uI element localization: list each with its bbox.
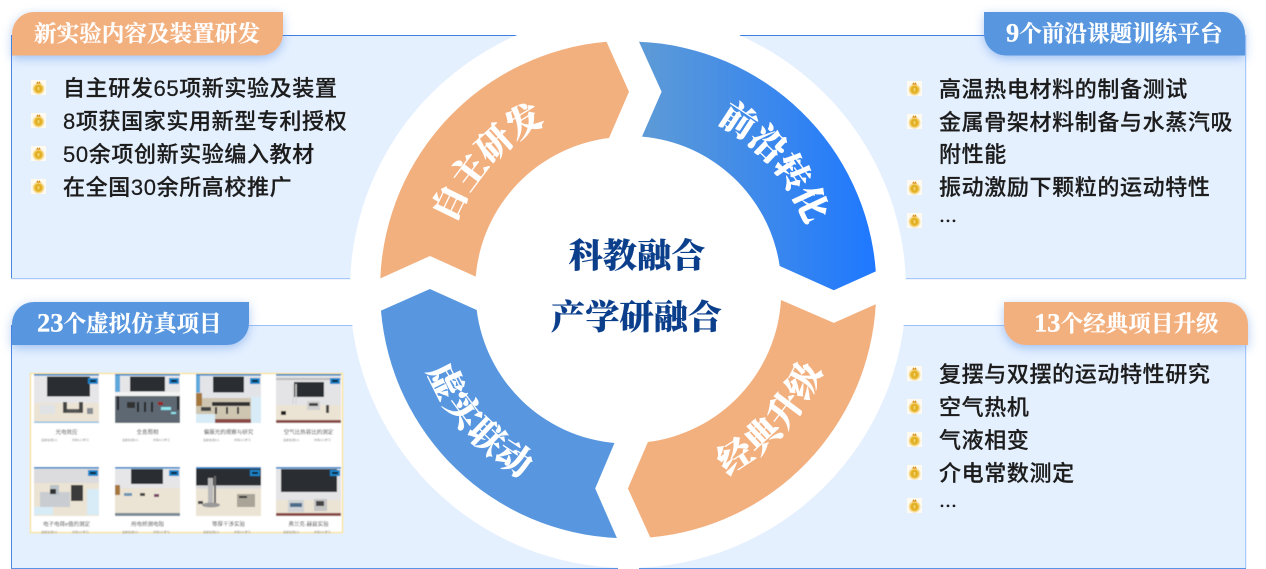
thumb: 用电桥测电阻 xyxy=(115,467,180,534)
thumb: 空气比热容比的测定: 空气比热容比的测定 xyxy=(284,428,334,436)
segment: 前沿转化: 前沿转化 xyxy=(718,100,828,224)
segment: 虚实联动 xyxy=(381,289,617,538)
segment: 自主研发 xyxy=(380,42,629,278)
center title: 科教融合 xyxy=(569,238,705,276)
item 3: 50余项创新实验编入教材 xyxy=(63,142,315,167)
center title: 产学研融合 xyxy=(551,298,722,337)
thumb: 等厚干涉实验 xyxy=(196,467,261,534)
heading tab: 新实验内容及装置研发 xyxy=(12,12,283,56)
thumb: 电子电荷e值的测定 xyxy=(34,467,99,534)
item 2: 附性能 xyxy=(939,142,1007,167)
item 4: … xyxy=(939,208,957,234)
thumb: 光电效应: 共有0人学习 xyxy=(72,437,89,442)
thumb: 空气比热容比的测定: 当前在线0人 xyxy=(283,437,300,442)
item 3: 振动激励下颗粒的运动特性 xyxy=(939,175,1210,200)
item 5: … xyxy=(939,493,957,519)
item 4: 在全国30余所高校推广 xyxy=(63,175,292,200)
item 2: 空气热机 xyxy=(939,395,1029,420)
list: bottom-right panel xyxy=(907,362,1210,519)
center title xyxy=(551,238,722,337)
list: top-right panel xyxy=(907,77,1233,234)
heading tab: 新实验内容及装置研发: 新实验内容及装置研发 xyxy=(34,22,260,46)
item 1: 自主研发65项新实验及装置 xyxy=(63,76,338,101)
segment: 虚实联动: 虚实联动 xyxy=(424,363,532,478)
segment: 经典升级: 经典升级 xyxy=(716,362,824,477)
thumb: 光电效应 xyxy=(34,374,99,442)
thumb: 等厚干涉实验: 共有0人学习 xyxy=(234,529,251,534)
thumb: 电子电荷e值的测定: 电子电荷e值的测定 xyxy=(43,520,91,528)
thumb: 弗兰克-赫兹实验 xyxy=(276,467,341,534)
item 1: 高温热电材料的制备测试 xyxy=(939,77,1188,102)
thumb: 全息照相 xyxy=(115,374,180,442)
item 1: 复摆与双摆的运动特性研究 xyxy=(939,362,1210,387)
thumb: 偏振光的观察与研究: 偏振光的观察与研究 xyxy=(204,428,254,436)
segment: 前沿转化 xyxy=(639,42,876,290)
thumb: 电子电荷e值的测定: 共有0人学习 xyxy=(72,529,89,534)
thumb: 全息照相: 全息照相 xyxy=(136,428,159,436)
heading tab: 13个经典项目升级: 13个经典项目升级 xyxy=(1034,308,1219,338)
heading tab: 23个虚拟仿真项目: 23个虚拟仿真项目 xyxy=(37,308,222,338)
virtual simulation screenshot grid xyxy=(30,374,342,534)
item 2: 8项获国家实用新型专利授权 xyxy=(63,109,347,134)
heading tab: 9个前沿课题训练平台: 9个前沿课题训练平台 xyxy=(1006,18,1224,48)
thumb: 全息照相: 当前在线0人 xyxy=(122,437,139,442)
thumb: 偏振光的观察与研究: 当前在线0人 xyxy=(203,437,220,442)
cycle ring diagram xyxy=(380,42,876,538)
heading tab: 23个虚拟仿真项目 xyxy=(12,302,249,345)
thumb: 空气比热容比的测定: 共有0人学习 xyxy=(314,437,331,442)
thumb: 偏振光的观察与研究 xyxy=(196,374,261,442)
thumb: 光电效应: 光电效应 xyxy=(55,428,78,436)
item 3: 气液相变 xyxy=(939,428,1029,453)
bottom gap notch xyxy=(618,556,639,569)
thumb: 用电桥测电阻: 当前在线0人 xyxy=(122,529,139,534)
thumb: 弗兰克-赫兹实验: 共有0人学习 xyxy=(314,529,331,534)
thumb: 全息照相: 共有0人学习 xyxy=(153,437,170,442)
item 4 xyxy=(907,208,957,234)
thumb: 空气比热容比的测定 xyxy=(276,374,341,442)
heading tab: 13个经典项目升级 xyxy=(1004,302,1248,345)
thumb: 偏振光的观察与研究: 共有0人学习 xyxy=(234,437,251,442)
segment: 经典升级 xyxy=(628,300,876,538)
list: top-left panel xyxy=(31,76,347,200)
white circle behind ring xyxy=(350,12,906,568)
thumb: 光电效应: 当前在线0人 xyxy=(41,437,58,442)
thumb: 电子电荷e值的测定: 当前在线0人 xyxy=(41,529,58,534)
thumb: 等厚干涉实验: 当前在线0人 xyxy=(203,529,220,534)
heading tab: 9个前沿课题训练平台 xyxy=(984,12,1245,56)
item 5 xyxy=(907,493,957,519)
item 2 xyxy=(907,110,1233,167)
thumb: 弗兰克-赫兹实验: 弗兰克-赫兹实验 xyxy=(288,520,329,528)
thumb: 弗兰克-赫兹实验: 当前在线0人 xyxy=(283,529,300,534)
item 4: 介电常数测定 xyxy=(939,461,1075,486)
item 2: 金属骨架材料制备与水蒸汽吸 xyxy=(939,110,1233,135)
thumb: 等厚干涉实验: 等厚干涉实验 xyxy=(212,520,245,528)
segment: 自主研发: 自主研发 xyxy=(432,104,544,220)
thumb: 用电桥测电阻: 共有0人学习 xyxy=(153,529,170,534)
thumb: 用电桥测电阻: 用电桥测电阻 xyxy=(131,520,164,528)
